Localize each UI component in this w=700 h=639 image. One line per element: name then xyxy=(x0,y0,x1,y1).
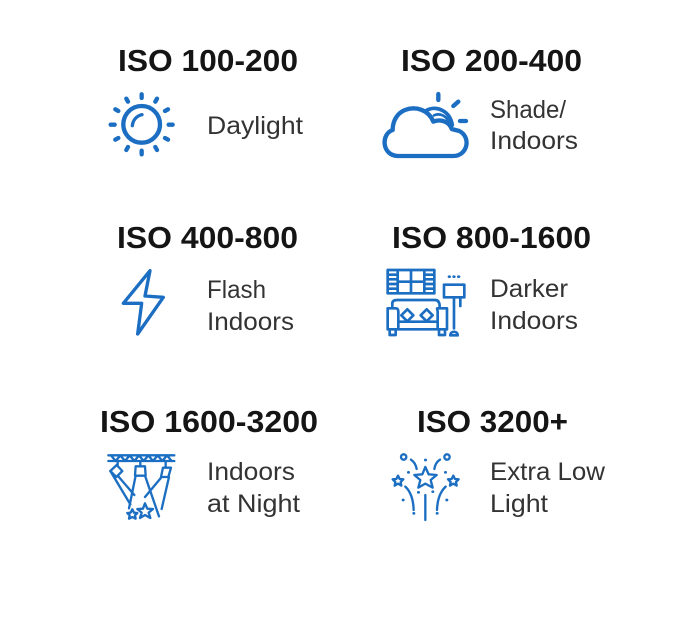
panel: ISO 100-200 xyxy=(111,43,303,154)
label: Extra Low Light: Extra Low xyxy=(490,458,606,486)
panel: ISO 1600-3200 xyxy=(100,404,318,519)
label: Extra Low Light: Light xyxy=(490,490,548,518)
panel: ISO 3200+ xyxy=(393,404,606,520)
icon: fireworks xyxy=(393,454,459,520)
panel: ISO 800-1600 xyxy=(388,220,591,335)
heading: ISO 800-1600: ISO 800-1600 xyxy=(392,220,591,255)
panel: ISO 200-400 xyxy=(385,43,582,156)
heading: ISO 100-200: ISO 100-200 xyxy=(118,43,298,78)
icon: living room xyxy=(388,270,464,335)
heading: ISO 3200+: ISO 3200+ xyxy=(417,404,568,439)
label: Flash Indoors xyxy=(207,276,294,336)
label: Shade/ Indoors: Shade/ xyxy=(490,96,566,124)
label: Extra Low Light xyxy=(490,458,606,518)
label: Darker Indoors: Indoors xyxy=(490,307,578,335)
label: Indoors at Night: at Night xyxy=(207,490,300,518)
icon: stage lights xyxy=(108,455,174,519)
heading: ISO 400-800: ISO 400-800 xyxy=(117,220,298,255)
label: Shade/ Indoors xyxy=(490,96,578,155)
label: Flash Indoors: Flash xyxy=(207,276,266,304)
label: Daylight: Daylight xyxy=(207,112,303,140)
label: Flash Indoors: Indoors xyxy=(207,308,294,336)
icon: sun xyxy=(111,94,173,154)
icon: cloud and sun xyxy=(385,94,467,156)
label: Indoors at Night: Indoors xyxy=(207,458,295,486)
icon: lightning bolt xyxy=(123,271,163,334)
label: Darker Indoors xyxy=(490,275,578,335)
heading: ISO 200-400: ISO 200-400 xyxy=(401,43,582,78)
label: Darker Indoors: Darker xyxy=(490,275,568,303)
label: Shade/ Indoors: Indoors xyxy=(490,127,578,155)
label: Indoors at Night xyxy=(207,458,300,518)
panel: ISO 400-800 xyxy=(117,220,298,336)
heading: ISO 1600-3200: ISO 1600-3200 xyxy=(100,404,318,439)
